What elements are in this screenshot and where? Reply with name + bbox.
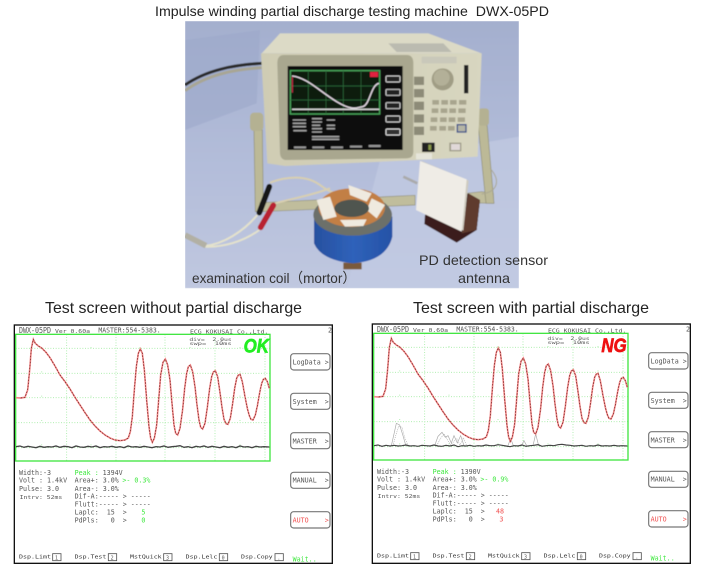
- header text: MASTER:554-5383.: [456, 325, 519, 333]
- readouts: Volt : 1.4kV: [19, 477, 67, 485]
- function keys: 2: [111, 555, 114, 561]
- readouts: Dif-A:----- > -----: [75, 492, 151, 500]
- readouts: Width:-3: [377, 468, 409, 476]
- partial discharge noise: [391, 423, 539, 446]
- side buttons: System >: [293, 398, 329, 406]
- function keys: Dsp.Copy: [241, 555, 273, 561]
- readouts: Area+: 3.0%: [433, 476, 477, 484]
- stand: [254, 130, 263, 212]
- side buttons: MASTER >: [293, 437, 329, 445]
- function keys: 0: [580, 554, 583, 560]
- function keys: 1: [413, 554, 416, 560]
- readouts: 1394V: [103, 469, 123, 477]
- baseline noise: [374, 444, 627, 447]
- side buttons: MASTER >: [651, 436, 687, 444]
- header text: 2: [686, 326, 690, 334]
- function keys: [377, 553, 675, 563]
- readouts: 5: [141, 509, 145, 517]
- function keys: .: [635, 554, 638, 560]
- header text: swp= 10ms: [189, 341, 232, 347]
- header text: ECG KOKUSAI Co.,Ltd.: [548, 328, 626, 334]
- verdict: OK: OK: [244, 336, 271, 357]
- readouts: Area-: 3.0%: [75, 485, 119, 493]
- cables at rear: [185, 63, 262, 85]
- side buttons: MANUAL >: [651, 476, 687, 484]
- readouts: Intrv: 52ms: [378, 494, 420, 500]
- function keys: 1: [55, 555, 58, 561]
- heading: with partial discharge: Test screen with partial discharge: [413, 300, 649, 317]
- function keys: 3: [166, 555, 169, 561]
- graph frame: [374, 333, 628, 460]
- heading: without partial discharge: Test screen without partial discharge: [45, 300, 302, 317]
- function keys: Dsp.Limt: [19, 555, 51, 561]
- readouts: Peak :: [75, 469, 99, 477]
- panel: OK test screen: [14, 325, 332, 564]
- readouts: Area+: 3.0%: [75, 477, 119, 485]
- function keys: 3: [524, 554, 527, 560]
- graph frame: [16, 334, 270, 461]
- header text: Ver 0.60a: [413, 328, 448, 334]
- function keys: 0: [222, 555, 225, 561]
- waveform: [16, 339, 269, 442]
- readouts: [377, 468, 509, 523]
- readouts: 48: [496, 508, 504, 516]
- function keys: Dsp.Test: [75, 555, 106, 561]
- header text: MASTER:554-5383.: [98, 326, 161, 334]
- coil stator: [343, 263, 362, 269]
- function keys: MstQuick: [488, 554, 521, 560]
- header text: [19, 325, 332, 347]
- side buttons: [649, 353, 688, 527]
- label: PD detection sensor: PD detection sensor: [419, 252, 548, 268]
- side buttons: [291, 354, 330, 528]
- readouts: Intrv: 52ms: [20, 495, 62, 501]
- function keys: Dsp.Test: [433, 554, 464, 560]
- header text: div= 2.0us: [547, 336, 590, 342]
- readouts: Volt : 1.4kV: [377, 476, 425, 484]
- function keys: [19, 554, 317, 564]
- leads: [270, 178, 343, 203]
- readouts: Pulse: 3.0: [377, 484, 417, 492]
- side buttons: AUTO >: [293, 516, 329, 524]
- header text: 2: [328, 327, 332, 335]
- readouts: 0: [141, 516, 145, 524]
- label: examination coil: examination coil（mortor）: [192, 270, 356, 286]
- monitor: [288, 66, 403, 150]
- waveform trace: [21, 339, 269, 442]
- machine keys: [414, 77, 424, 135]
- function keys: Wait..: [651, 555, 675, 563]
- waveform trace: [379, 338, 627, 441]
- sensor antenna: [424, 193, 480, 243]
- function keys: Dsp.Copy: [599, 554, 631, 560]
- readouts: Area-: 3.0%: [433, 484, 477, 492]
- side buttons: System >: [651, 397, 687, 405]
- readouts: Peak :: [433, 468, 457, 476]
- header text: ECG KOKUSAI Co.,Ltd.: [190, 329, 268, 335]
- readouts: Flutt:----- > -----: [433, 499, 509, 507]
- title: Impulse winding partial discharge testing machine DWX-05PD: [155, 3, 549, 19]
- waveform: [374, 338, 627, 441]
- function keys: Dsp.Lelc: [544, 554, 575, 560]
- side buttons: LogData >: [651, 357, 687, 365]
- verdict: NG: NG: [601, 336, 627, 357]
- machine body: [262, 33, 482, 53]
- baseline noise: [16, 446, 269, 448]
- header text: DWX-05PD: [377, 324, 409, 334]
- readouts: >- 0.9%: [480, 476, 508, 484]
- function keys: Dsp.Limt: [377, 554, 409, 560]
- function keys: 2: [469, 554, 472, 560]
- label: antenna: antenna: [458, 270, 510, 286]
- side buttons: LogData >: [293, 358, 329, 366]
- readouts: PdPls: 0 >: [75, 516, 127, 524]
- readouts: Laplc: 15 >: [433, 508, 485, 516]
- readouts: [19, 469, 151, 524]
- readouts: Dif-A:----- > -----: [433, 491, 509, 499]
- function keys: MstQuick: [130, 555, 163, 561]
- header text: swp= 10ms: [547, 340, 590, 346]
- readouts: Width:-3: [19, 469, 51, 477]
- header text: DWX-05PD: [19, 325, 51, 335]
- side buttons: MANUAL >: [293, 477, 329, 485]
- function keys: .: [277, 555, 280, 561]
- header text: div= 2.0us: [189, 337, 232, 343]
- readouts: Flutt:----- > -----: [75, 500, 151, 508]
- panel: NG test screen: [372, 324, 690, 563]
- header text: Ver 0.60a: [55, 329, 90, 335]
- function keys: Dsp.Lelc: [186, 555, 217, 561]
- photo: testing machine setup: [185, 21, 519, 288]
- readouts: Pulse: 3.0: [19, 485, 59, 493]
- readouts: >- 0.3%: [122, 477, 150, 485]
- readouts: 1390V: [461, 468, 481, 476]
- side buttons: AUTO >: [651, 515, 687, 523]
- readouts: 3: [499, 515, 503, 523]
- readouts: Laplc: 15 >: [75, 509, 127, 517]
- header text: [377, 324, 690, 346]
- readouts: PdPls: 0 >: [433, 515, 485, 523]
- function keys: Wait..: [293, 556, 317, 564]
